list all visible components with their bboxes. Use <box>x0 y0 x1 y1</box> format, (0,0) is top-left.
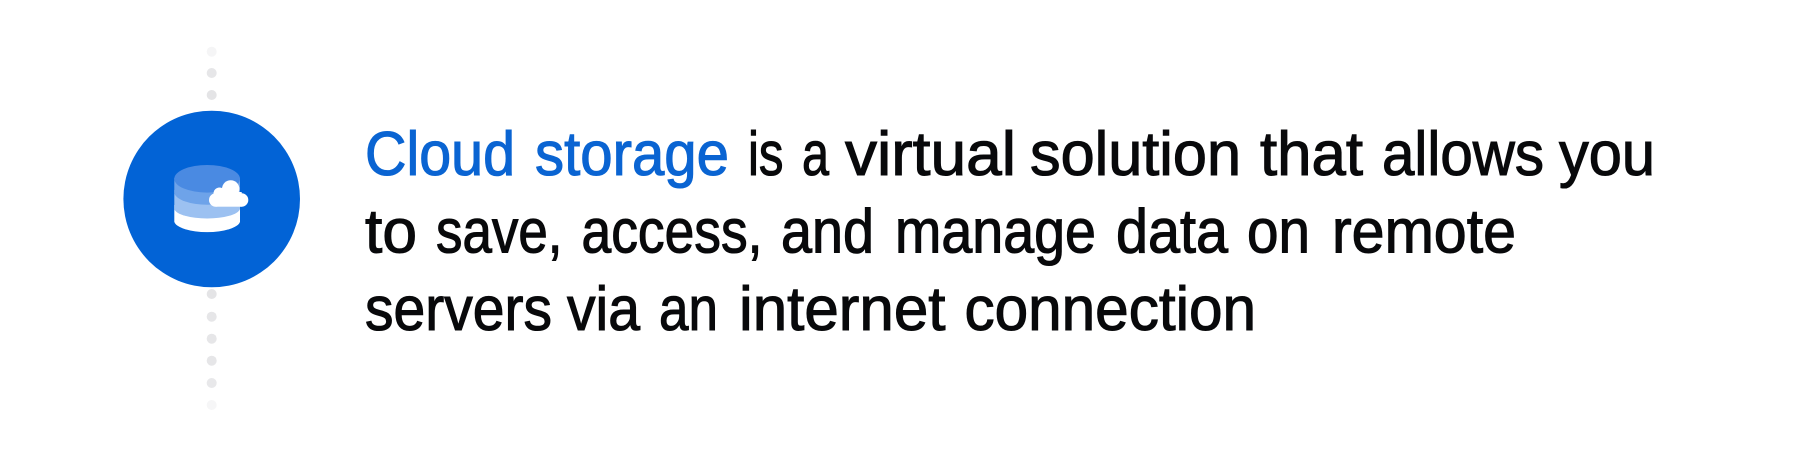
line 2: save, <box>436 198 562 266</box>
line 2: manage <box>895 198 1096 266</box>
line 2: access, <box>582 198 762 266</box>
line 2: on <box>1247 198 1310 266</box>
text block: cloud storage definition <box>365 120 1655 344</box>
line 1: solution <box>1030 120 1241 189</box>
icon: cloud <box>209 180 248 207</box>
line 2: to <box>365 198 417 266</box>
line 1: is <box>748 120 784 189</box>
icon: database cylinder <box>174 165 240 232</box>
line 3: connection <box>964 275 1256 344</box>
line 1: that <box>1260 120 1363 189</box>
line 3: internet <box>739 275 946 344</box>
line 3 <box>365 275 1256 344</box>
line 2: data <box>1116 198 1228 266</box>
line 1: you <box>1559 120 1655 189</box>
line 2: and <box>781 198 874 266</box>
line 3: servers <box>365 275 552 344</box>
highlighted term: storage <box>535 120 729 189</box>
icon: blue circle with cloud database <box>123 111 300 287</box>
line 3: an <box>659 275 718 344</box>
line 1: virtual <box>845 120 1016 189</box>
line 1 <box>748 120 1655 189</box>
line 3: via <box>567 275 640 344</box>
line 1: a <box>802 120 829 189</box>
highlighted term <box>365 120 729 189</box>
line 2 <box>365 198 1516 266</box>
line 1: allows <box>1382 120 1544 189</box>
dotted vertical line <box>207 47 217 410</box>
highlighted term: Cloud <box>365 120 515 189</box>
line 2: remote <box>1332 198 1516 266</box>
